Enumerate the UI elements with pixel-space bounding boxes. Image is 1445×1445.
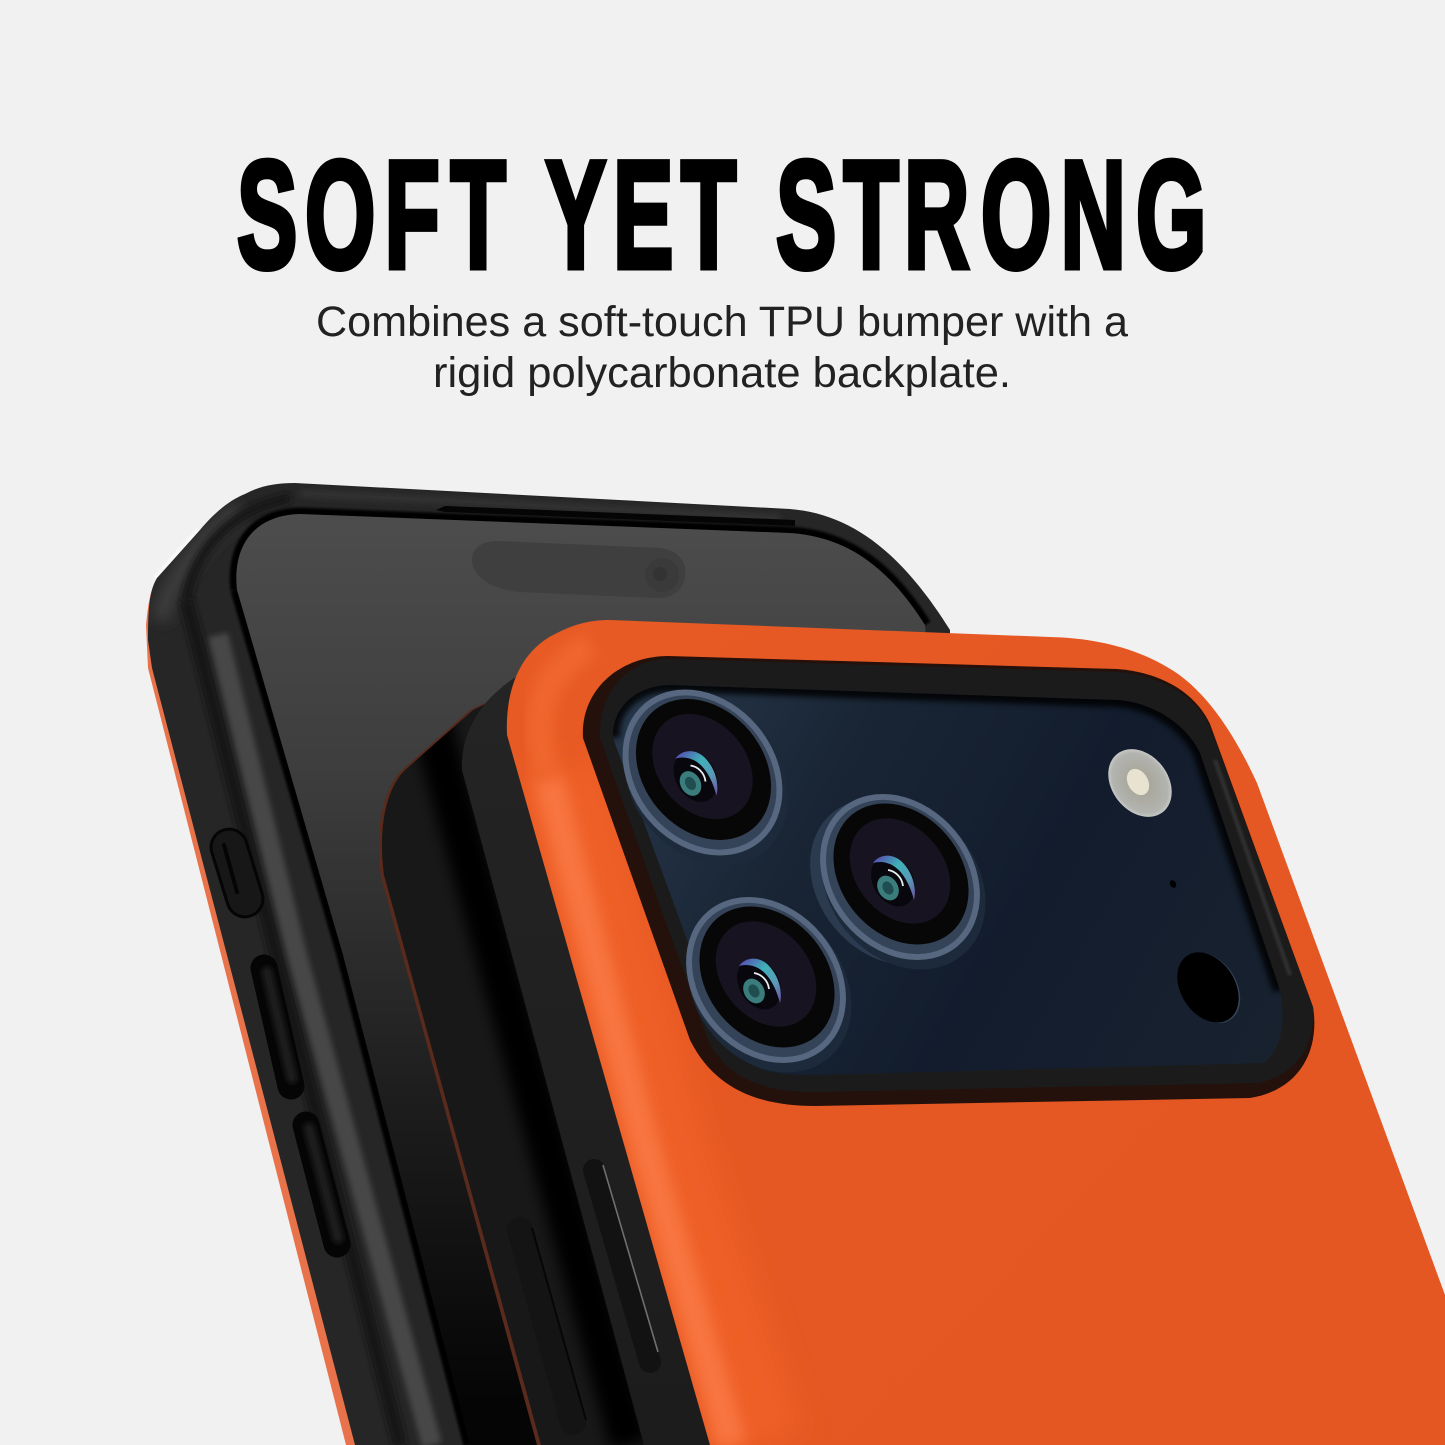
back phone in case, screen side <box>146 483 950 1445</box>
front phone in case, back side <box>379 620 1445 1445</box>
shadow gap on base block <box>425 700 630 1445</box>
subtitle <box>316 298 1128 397</box>
screen groove <box>236 514 925 1445</box>
corner sheen <box>155 530 198 578</box>
orange edge highlight <box>540 645 760 1445</box>
lidar sensor hole <box>1165 941 1253 1035</box>
camera bump base block <box>382 640 800 1445</box>
side black bumper <box>462 678 653 1445</box>
dynamic island <box>472 541 686 598</box>
glass inner shadow <box>613 685 1280 990</box>
lens: middle <box>787 762 1019 1002</box>
lower side button <box>520 1228 586 1422</box>
orange back edge sliver <box>146 578 360 1445</box>
screen <box>236 514 950 1445</box>
mute switch <box>207 825 267 921</box>
upper side button <box>594 1165 658 1362</box>
rear reddish edge <box>379 640 800 1445</box>
top notch lip <box>436 506 795 526</box>
microphone dot <box>1168 879 1178 889</box>
subtitle: rigid polycarbonate backplate. <box>433 349 1011 397</box>
bumper shading <box>160 493 780 1445</box>
lens: top <box>589 657 822 898</box>
camera island rim <box>600 659 1313 1092</box>
lens: bottom <box>653 865 885 1105</box>
subtitle: Combines a soft-touch TPU bumper with a <box>316 298 1128 346</box>
volume down button <box>306 1125 338 1244</box>
black bumper frame <box>148 483 950 1445</box>
rim ridge <box>1215 760 1290 975</box>
camera glass panel <box>613 685 1283 1075</box>
title: SOFT YET STRONG <box>237 129 1206 300</box>
camera island shadow <box>583 656 1314 1106</box>
lens barrel: middle <box>777 767 1003 997</box>
volume up button <box>264 968 292 1086</box>
flash <box>1095 737 1185 829</box>
orange backplate <box>507 620 1445 1445</box>
